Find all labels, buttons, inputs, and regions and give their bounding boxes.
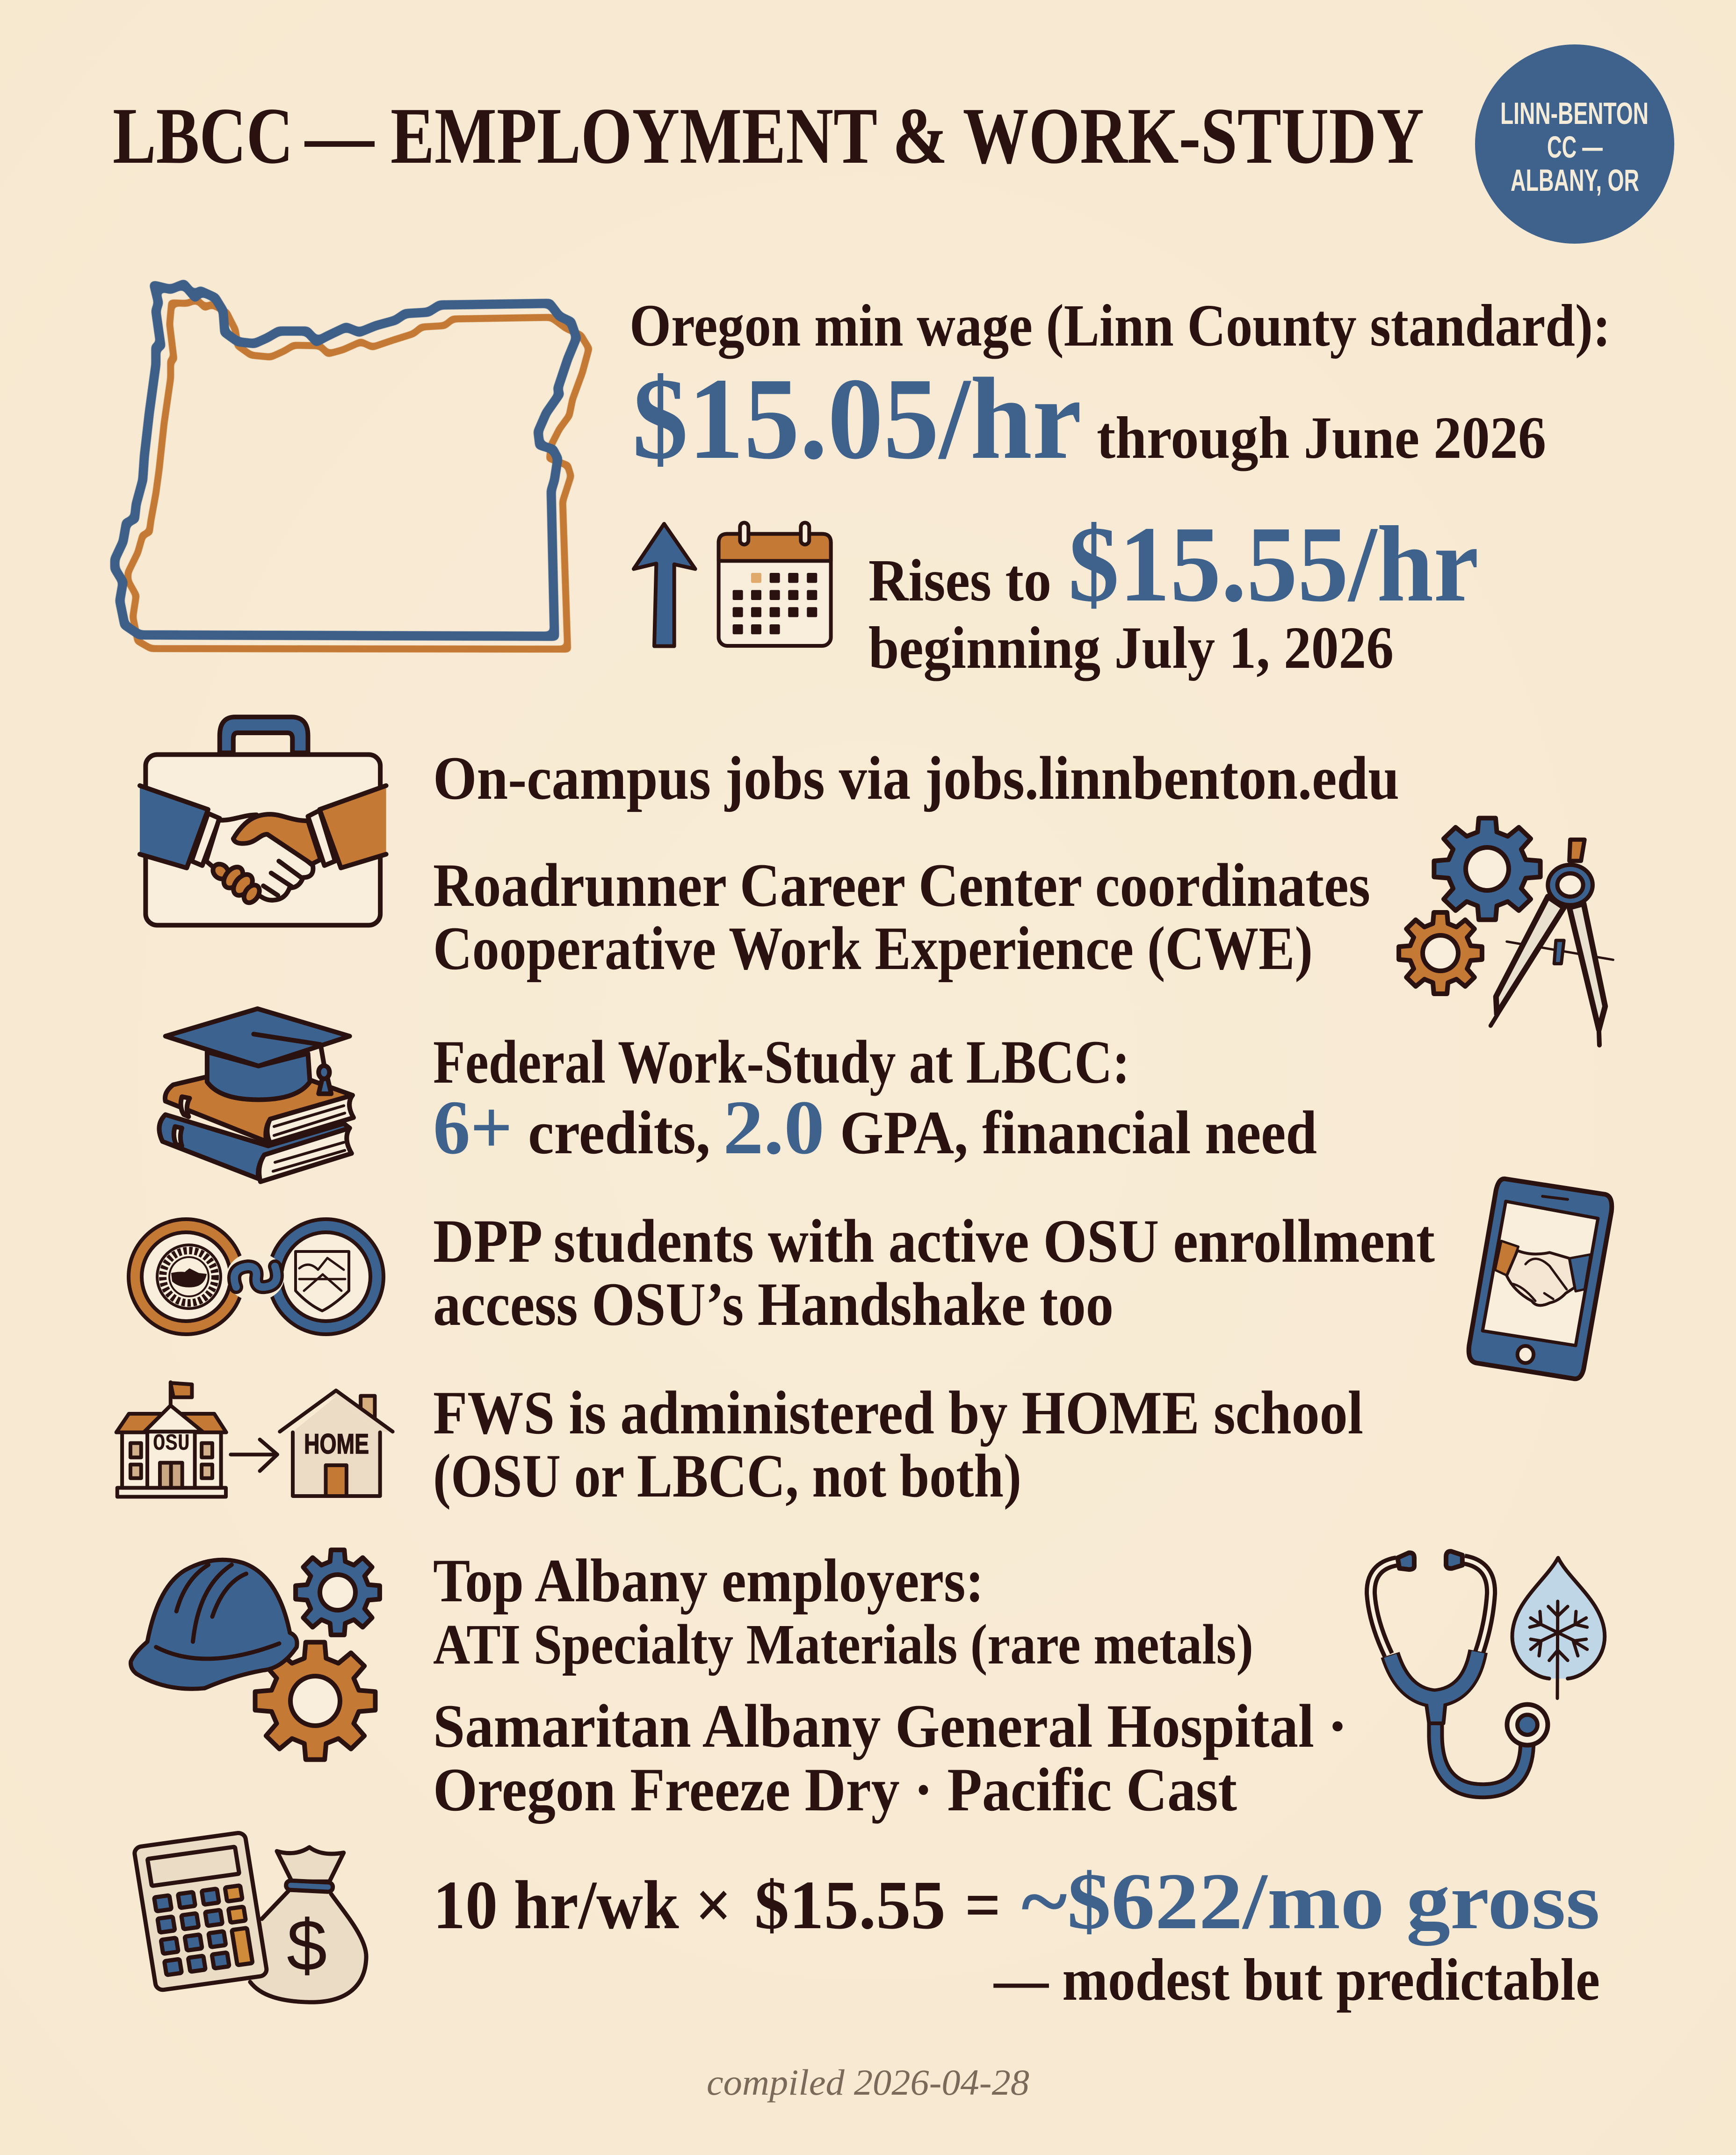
icon: school to home bbox=[116, 1382, 393, 1497]
icon: frozen droplet leaf bbox=[1512, 1558, 1605, 1699]
text: Oregon minimum wage: Oregon min wage (Linn County standard): bbox=[629, 292, 1611, 359]
text: monthly gross calculation: ~$622/mo gross bbox=[1021, 1857, 1600, 1946]
text: Federal Work-Study requirements: credits, bbox=[528, 1098, 710, 1167]
text: through June 2026: through June 2026 bbox=[1097, 405, 1546, 471]
text: Roadrunner Career Center and CWE bbox=[433, 851, 1370, 983]
text: FWS home school: FWS is administered by HOME school bbox=[433, 1378, 1363, 1447]
text: Federal Work-Study requirements: 6+ bbox=[433, 1085, 513, 1170]
footer: compiled date: compiled 2026-04-28 bbox=[707, 2062, 1029, 2103]
text: top Albany employers: Oregon Freeze Dry · Pacific Cast bbox=[433, 1755, 1237, 1824]
icon: school to home: OSU bbox=[153, 1431, 190, 1457]
icon: briefcase with handshake bbox=[140, 717, 386, 925]
text: beginning July 1, 2026: beginning July 1, 2026 bbox=[868, 615, 1394, 681]
text: Roadrunner Career Center and CWE: Cooperative Work Experience (CWE) bbox=[433, 914, 1313, 983]
text: modest but predictable: — modest but predictable bbox=[993, 1946, 1600, 2013]
icon: hard hat and gears bbox=[131, 1550, 380, 1759]
icon: phone with handshake bbox=[1469, 1179, 1612, 1379]
text: top Albany employers: · bbox=[1327, 1692, 1348, 1760]
title bbox=[113, 92, 1424, 181]
text: Federal Work-Study requirements: GPA, financial need bbox=[840, 1098, 1317, 1167]
text: monthly gross calculation: = bbox=[965, 1867, 1001, 1944]
title: — bbox=[304, 92, 375, 181]
text: DPP students and Handshake: DPP students with active OSU enrollment bbox=[433, 1207, 1435, 1275]
icon: calculator and money bag bbox=[134, 1832, 366, 2002]
icon: school to home: HOME bbox=[304, 1428, 369, 1460]
text: Federal Work-Study requirements: 2.0 bbox=[723, 1085, 825, 1170]
text: top Albany employers bbox=[433, 1546, 1348, 1824]
text: Federal Work-Study requirements: Federal Work-Study at LBCC: bbox=[433, 1027, 1130, 1096]
icon: graduation cap on books bbox=[159, 1009, 354, 1182]
text: monthly gross calculation: $15.55 bbox=[754, 1867, 946, 1944]
icon: up arrow bbox=[634, 524, 695, 646]
text: on-campus jobs: On-campus jobs via jobs.linnbenton.edu bbox=[433, 744, 1399, 812]
text: DPP students and Handshake: access OSU’s Handshake too bbox=[433, 1270, 1114, 1338]
text: Federal Work-Study requirements bbox=[433, 1027, 1317, 1170]
icon: calendar bbox=[719, 523, 831, 646]
text: dollar sign on bag: $ bbox=[287, 1905, 327, 1986]
badge: Linn-Benton CC, Albany OR: LINN-BENTON bbox=[1500, 96, 1649, 130]
stat: $15.55/hr: $15.55/hr bbox=[1068, 504, 1479, 624]
badge: Linn-Benton CC, Albany OR bbox=[1475, 44, 1674, 244]
text: Roadrunner Career Center and CWE: Roadrunner Career Center coordinates bbox=[433, 851, 1370, 919]
text: top Albany employers: ATI Specialty Materials (rare metals) bbox=[433, 1613, 1253, 1676]
badge: Linn-Benton CC, Albany OR: ALBANY, OR bbox=[1511, 163, 1639, 197]
text: rises to: Rises to bbox=[868, 547, 1051, 614]
text: FWS home school: (OSU or LBCC, not both) bbox=[433, 1441, 1021, 1510]
badge: Linn-Benton CC, Albany OR: CC — bbox=[1547, 130, 1603, 164]
text: monthly gross calculation: 10 hr/wk × bbox=[433, 1867, 732, 1944]
text: DPP students and Handshake bbox=[433, 1207, 1435, 1338]
text: FWS home school bbox=[433, 1378, 1363, 1510]
icon: linked OSU and LBCC seals bbox=[129, 1219, 383, 1334]
icon: Oregon state outline bbox=[115, 284, 589, 649]
icon: stethoscope bbox=[1371, 1551, 1548, 1791]
title: EMPLOYMENT & WORK-STUDY bbox=[391, 92, 1424, 181]
stat: $15.05/hr: $15.05/hr bbox=[632, 354, 1082, 484]
icon: gears and drafting compass bbox=[1399, 818, 1613, 1045]
text: top Albany employers: Samaritan Albany General Hospital bbox=[433, 1692, 1314, 1760]
text: top Albany employers: Top Albany employers: bbox=[433, 1546, 984, 1615]
text: monthly gross calculation bbox=[433, 1857, 1600, 1946]
title: LBCC bbox=[113, 92, 293, 181]
